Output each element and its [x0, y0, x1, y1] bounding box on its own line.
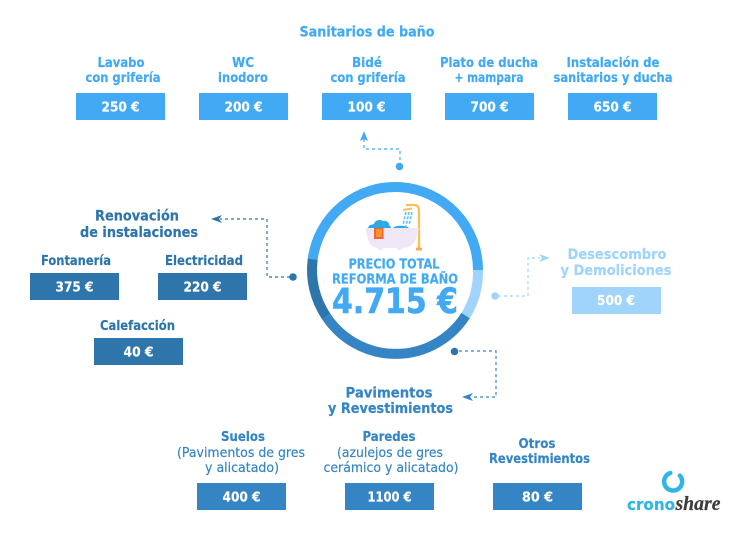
logo: cronoshare: share [675, 493, 721, 515]
item: fontanería: 375 € [56, 280, 94, 296]
item: suelos: 400 € [222, 490, 260, 506]
item: electricidad: 220 € [184, 280, 222, 296]
item: paredes: Paredes [362, 429, 416, 445]
logo: cronoshare [627, 472, 721, 515]
heading: desescombro [560, 247, 672, 279]
item: wc: 200 € [224, 100, 262, 116]
ring segment: renovación [312, 259, 326, 316]
item: 500: 500 € [597, 293, 635, 309]
item: wc: inodoro [218, 70, 268, 86]
icon: bathtub [366, 205, 422, 250]
section: pavimentos y revestimientos [177, 386, 590, 510]
heading: sanitarios: Sanitarios de baño [300, 24, 435, 40]
item: lavabo: Lavabo [98, 55, 144, 71]
item: suelos [177, 429, 305, 510]
item: paredes: cerámico y alicatado) [324, 460, 458, 476]
item: plato de ducha [440, 55, 538, 120]
item: instalación: Instalación de [566, 55, 660, 71]
item: bidé [322, 55, 411, 120]
heading: pavimentos: y Revestimientos [328, 401, 453, 417]
item: electricidad [158, 253, 247, 300]
item: otros [489, 436, 590, 510]
ring segment: pavimentos [326, 316, 466, 354]
item: suelos: y alicatado) [205, 460, 279, 476]
section: desescombro [560, 247, 672, 314]
section: renovación de instalaciones [30, 208, 247, 365]
total text: PRECIO TOTAL [348, 256, 440, 272]
item: plato de ducha: + mampara [454, 70, 524, 86]
item: lavabo: 250 € [102, 100, 140, 116]
item: paredes: 1100 € [368, 490, 412, 506]
heading: desescombro: y Demoliciones [560, 263, 672, 279]
heading: pavimentos: Pavimentos [346, 386, 432, 402]
item: lavabo: con grifería [86, 70, 160, 86]
item: bidé: Bidé [352, 55, 382, 71]
ring segment: desescombro [466, 270, 478, 316]
item: fontanería [30, 253, 119, 300]
total ring [312, 187, 478, 354]
item: calefacción: Calefacción [100, 318, 175, 334]
item: plato de ducha: 700 € [470, 100, 508, 116]
item: fontanería: Fontanería [41, 253, 111, 269]
item: otros: Otros [518, 436, 556, 452]
item: wc: WC [232, 55, 254, 71]
total text [332, 256, 458, 322]
item: suelos: (Pavimentos de gres [177, 445, 305, 461]
logo: cronoshare: crono [627, 495, 675, 514]
arrow: to desescombro [491, 254, 550, 300]
item: otros: Revestimientos [489, 451, 590, 467]
item: lavabo [76, 55, 165, 120]
heading: renovación: de instalaciones [80, 225, 198, 241]
arrow: to sanitarios [360, 131, 403, 170]
item: paredes [324, 429, 458, 510]
item: paredes: (azulejos de gres [337, 445, 443, 461]
item: wc [199, 55, 288, 120]
item: calefacción: 40 € [124, 344, 154, 360]
heading: renovación [80, 208, 198, 241]
heading: desescombro: Desescombro [568, 247, 667, 263]
arrow: to renovación [211, 215, 297, 281]
item: bidé: con grifería [330, 70, 406, 86]
item: instalación [554, 55, 672, 120]
total text: 4.715 € [332, 282, 458, 322]
item: otros: 80 € [522, 490, 553, 506]
ring segment: sanitarios [313, 187, 478, 270]
item: suelos: Suelos [221, 429, 265, 445]
total text: REFORMA DE BAÑO [332, 270, 458, 288]
arrow: to pavimentos [451, 348, 496, 401]
heading: renovación: Renovación [95, 208, 179, 224]
item: instalación: 650 € [594, 100, 632, 116]
section: sanitarios de baño [76, 24, 672, 120]
heading: pavimentos [328, 386, 453, 417]
item: instalación: sanitarios y ducha [554, 70, 672, 86]
item: calefacción [94, 318, 183, 365]
item: plato de ducha: Plato de ducha [440, 55, 538, 71]
item: electricidad: Electricidad [165, 253, 243, 269]
item: bidé: 100 € [348, 100, 386, 116]
